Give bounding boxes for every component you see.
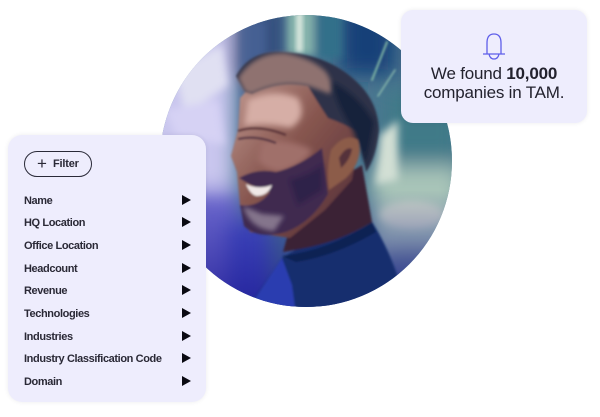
filter row: Headcount	[24, 263, 191, 275]
neck	[283, 165, 372, 252]
head and face	[231, 74, 362, 238]
cheek highlight	[258, 141, 312, 172]
icon: bell	[483, 33, 505, 60]
filter row: Office Location	[24, 240, 191, 252]
filter button	[24, 151, 92, 177]
filter row: Headcount: Headcount	[24, 263, 77, 275]
filter row: Technologies: Technologies	[24, 308, 89, 320]
hair	[236, 52, 379, 172]
filter row: Industries: Industries	[24, 331, 73, 343]
panel: TAM callout	[401, 10, 587, 123]
filter row: HQ Location: HQ Location	[24, 217, 85, 229]
filter button: Filter	[53, 158, 79, 170]
eye and brow	[238, 128, 286, 135]
callout text	[424, 64, 564, 102]
man	[231, 52, 402, 320]
callout text: companies in TAM.	[424, 83, 564, 102]
smile	[246, 184, 272, 196]
filter row: Revenue: Revenue	[24, 285, 67, 297]
filter row: Domain: Domain	[24, 376, 62, 388]
portrait photo in circle	[162, 15, 452, 307]
filter row: Office Location: Office Location	[24, 240, 98, 252]
beard	[239, 148, 328, 235]
filter row: Industry Classification Code: Industry Classification Code	[24, 353, 162, 365]
callout text: We found 10,000	[431, 64, 557, 83]
filter row: HQ Location	[24, 217, 191, 229]
shirt	[255, 223, 398, 307]
panel: filter list	[8, 135, 206, 402]
filter row: Industries	[24, 331, 191, 343]
filter row: Technologies	[24, 308, 191, 320]
background	[162, 15, 452, 307]
ear	[328, 138, 360, 190]
filter button: +	[37, 154, 47, 173]
filter row: Revenue	[24, 285, 191, 297]
filter row: Name: Name	[24, 195, 52, 207]
filter row: Name	[24, 195, 191, 207]
forehead highlight	[244, 93, 302, 128]
filter row: Domain	[24, 376, 191, 388]
